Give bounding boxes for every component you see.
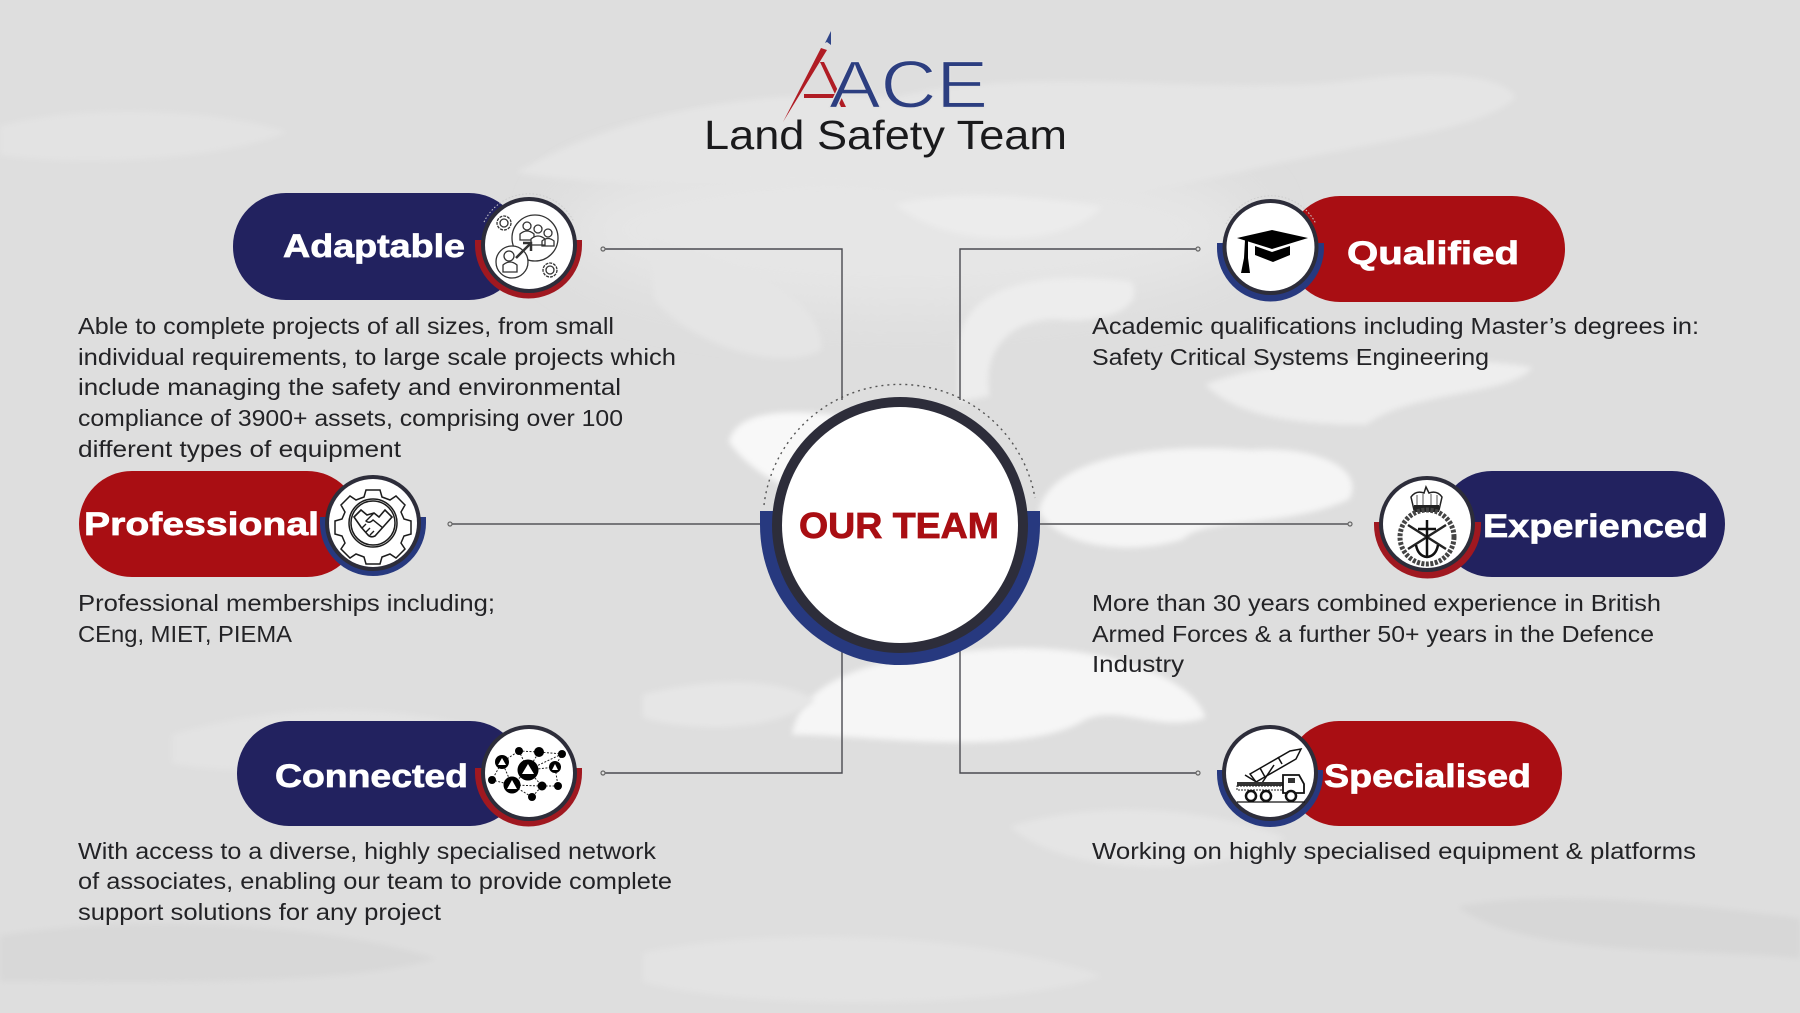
central circle: our team (760, 384, 1040, 665)
text: connected description: support solutions for any project (78, 899, 441, 925)
title: Land Safety Team (704, 112, 1067, 158)
icon: missile launcher truck (1237, 749, 1305, 802)
text: professional description: Professional memberships including; (78, 590, 495, 616)
text: professional description: CEng, MIET, PIEMA (78, 621, 292, 647)
badge: qualified (1217, 196, 1565, 302)
badge: specialised (1217, 721, 1562, 827)
logo: ACE wordmark: ACE (829, 48, 988, 122)
connector lines (448, 247, 1352, 775)
icon: people network (496, 215, 558, 278)
text: connected description (78, 838, 672, 925)
text: specialised description: Working on highly specialised equipment & platforms (1092, 838, 1696, 864)
text: qualified description (1092, 313, 1699, 370)
badge: professional (79, 471, 426, 577)
logo: rocket mark (783, 31, 846, 122)
label: Qualified (1347, 235, 1519, 271)
text: adaptable description (78, 313, 676, 462)
icon: graduation cap (1237, 230, 1308, 273)
text: adaptable description: Able to complete projects of all sizes, from small (78, 313, 614, 339)
text: qualified description: Academic qualifications including Master’s degrees in: (1092, 313, 1699, 339)
badge: connected (237, 721, 582, 826)
text: experienced description (1092, 590, 1661, 677)
badge: adaptable (233, 193, 582, 300)
icon: gear with handshake (335, 490, 411, 564)
label: Professional (84, 506, 319, 542)
text: experienced description: Armed Forces & a further 50+ years in the Defence (1092, 621, 1654, 647)
text: professional description (78, 590, 495, 647)
text: adaptable description: different types of equipment (78, 436, 402, 462)
text: adaptable description: individual requirements, to large scale projects which (78, 344, 676, 370)
text: experienced description: Industry (1092, 651, 1184, 677)
text: adaptable description: include managing the safety and environmental (78, 374, 621, 400)
text: connected description: of associates, enabling our team to provide complete (78, 868, 672, 894)
logo (783, 31, 988, 122)
label: Experienced (1483, 508, 1708, 544)
text: experienced description: More than 30 years combined experience in British (1092, 590, 1661, 616)
center label: OUR TEAM (799, 505, 999, 546)
label: Adaptable (283, 228, 465, 264)
badge: experienced (1374, 471, 1725, 578)
icon: network nodes (488, 747, 566, 801)
icon: crown and wreath crest (1400, 487, 1454, 564)
text: adaptable description: compliance of 3900+ assets, comprising over 100 (78, 405, 623, 431)
text: connected description: With access to a diverse, highly specialised network (78, 838, 656, 864)
label: Connected (275, 758, 468, 794)
text: qualified description: Safety Critical Systems Engineering (1092, 344, 1489, 370)
label: Specialised (1324, 758, 1531, 794)
